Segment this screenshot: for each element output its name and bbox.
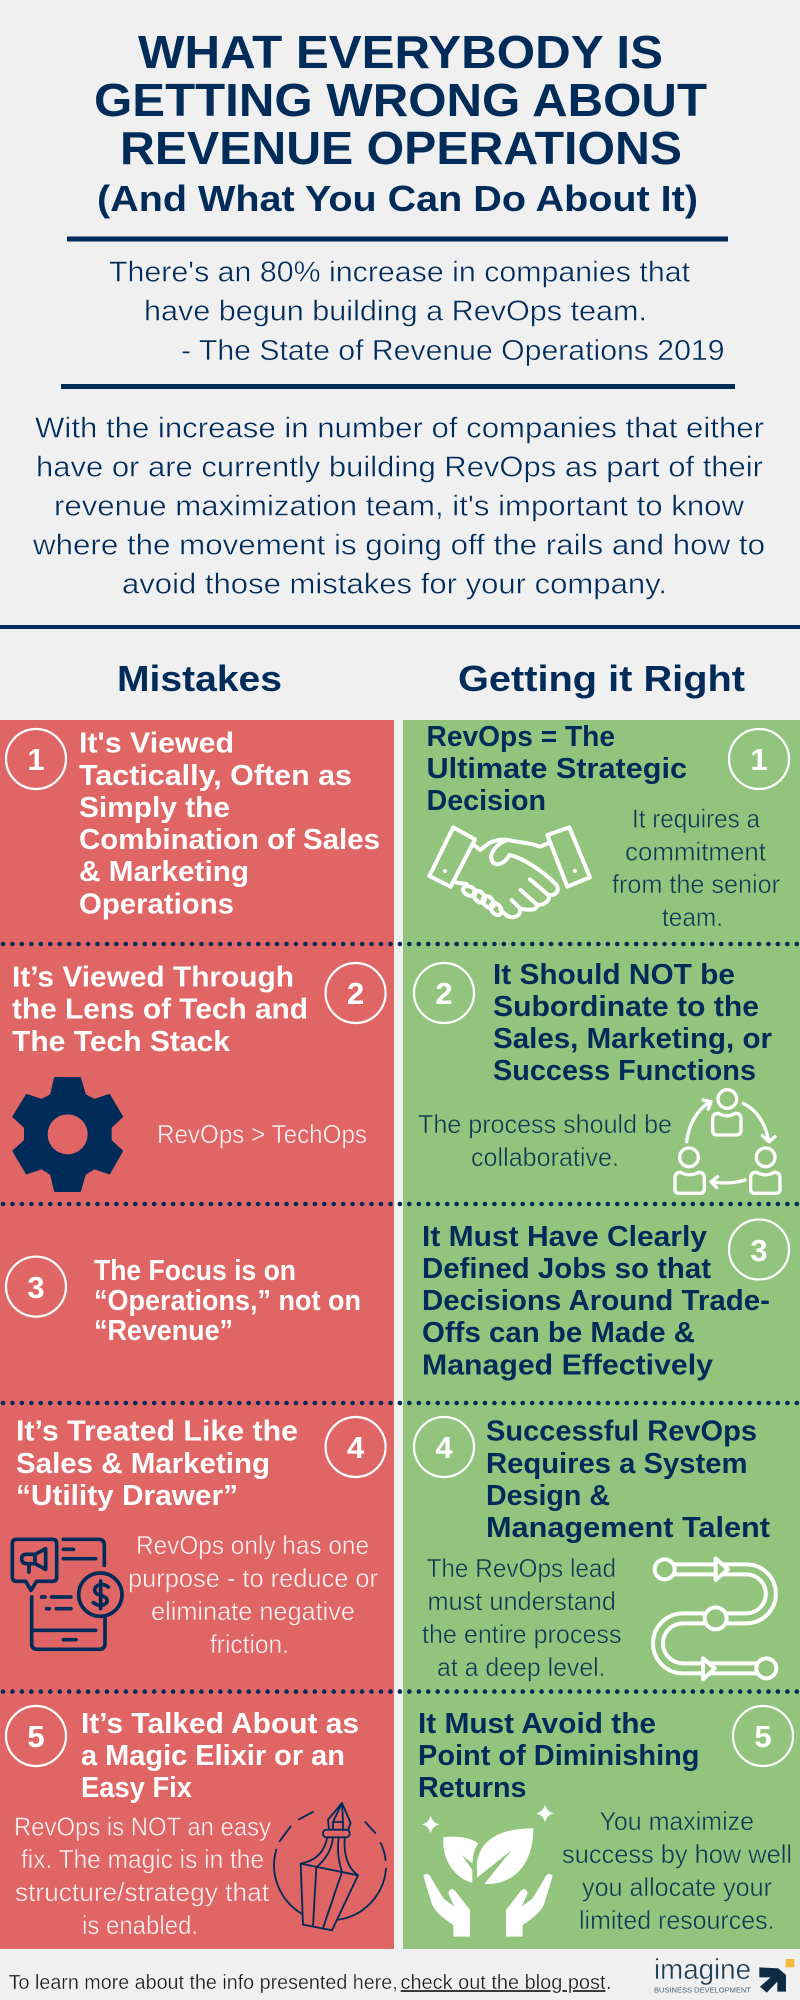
number badge 3	[6, 1257, 66, 1317]
body text: right 1: team.	[662, 902, 723, 932]
footer text	[9, 1972, 612, 1994]
panel: right 3	[403, 1204, 800, 1403]
heading: mistake 1: & Marketing	[79, 856, 249, 888]
heading: right 3: Decisions Around Trade-	[422, 1285, 770, 1317]
body text: mistake 5: is enabled.	[82, 1910, 198, 1940]
body text: right 1: It requires a	[632, 804, 760, 834]
icon: collaboration cycle	[675, 1090, 780, 1193]
heading: right 4: Management Talent	[486, 1512, 770, 1544]
body text: mistake 4	[128, 1530, 378, 1659]
number badge 1: 1	[27, 742, 45, 777]
panel: right 5	[403, 1692, 800, 1949]
title: WHAT EVERYBODY IS	[138, 26, 663, 78]
icon: elixir bottle	[274, 1803, 386, 1930]
body text: right 4: the entire process	[422, 1619, 622, 1649]
icon: handshake	[429, 827, 590, 917]
number badge 1: 1	[750, 742, 768, 777]
number badge 4: 4	[347, 1430, 365, 1465]
number badge 3	[729, 1220, 789, 1280]
heading: mistake 4: It’s Treated Like the	[16, 1416, 298, 1448]
heading: mistake 5: Easy Fix	[81, 1772, 192, 1804]
heading: right 1	[426, 721, 687, 817]
heading: right 4: Design &	[486, 1480, 610, 1512]
heading: right 2: Subordinate to the	[493, 991, 759, 1023]
intro paragraph: avoid those mistakes for your company.	[122, 569, 667, 601]
body text: right 1: from the senior	[612, 869, 780, 899]
body text: right 5: success by how well	[562, 1839, 792, 1869]
statistic quote: - The State of Revenue Operations 2019	[181, 335, 724, 367]
icon: phone with megaphone and dollar	[12, 1539, 122, 1649]
footer text: .	[606, 1972, 612, 1994]
number badge 4	[414, 1417, 474, 1477]
intro paragraph	[32, 412, 765, 601]
panel: mistake 1	[0, 720, 394, 944]
number badge 5	[733, 1706, 793, 1766]
heading: right 2: Sales, Marketing, or	[493, 1023, 772, 1055]
heading: mistake 3: “Operations,” not on	[94, 1285, 361, 1317]
body text: right 2: collaborative.	[471, 1142, 619, 1172]
body text: right 5: limited resources.	[579, 1905, 774, 1935]
number badge 1	[6, 729, 66, 789]
heading: right 1: Ultimate Strategic	[426, 753, 687, 785]
body text: right 4: at a deep level.	[437, 1652, 606, 1682]
logo: Imagine Business Development: BUSINESS DEVELOPMENT	[654, 1986, 751, 1995]
heading: mistake 4	[16, 1416, 298, 1512]
body text: right 2: The process should be	[418, 1109, 672, 1139]
heading: right 5: Returns	[418, 1772, 526, 1804]
body text: mistake 5	[14, 1812, 271, 1940]
heading: right 3	[422, 1221, 770, 1382]
heading: right 2	[493, 959, 772, 1087]
number badge 5: 5	[27, 1719, 45, 1754]
number badge 2	[414, 963, 474, 1023]
number badge 2	[326, 963, 386, 1023]
number badge 2: 2	[435, 976, 453, 1011]
intro paragraph: where the movement is going off the rails and how to	[32, 530, 765, 562]
body text: mistake 2: RevOps > TechOps	[157, 1119, 367, 1149]
heading: right 5	[418, 1708, 700, 1804]
number badge 1	[729, 729, 789, 789]
heading: right 2: Success Functions	[493, 1055, 756, 1087]
heading: mistake 1: Simply the	[79, 792, 230, 824]
logo: Imagine Business Development: imagine	[654, 1954, 751, 1986]
number badge 3: 3	[27, 1270, 45, 1305]
footer text: To learn more about the info presented here,	[9, 1972, 398, 1994]
heading: mistake 1: Tactically, Often as	[79, 760, 352, 792]
column heading: mistakes: Mistakes	[117, 658, 282, 699]
body text: mistake 4: eliminate negative	[151, 1596, 355, 1626]
icon: gear	[13, 1078, 122, 1191]
heading: right 4: Successful RevOps	[486, 1416, 757, 1448]
heading: right 3: It Must Have Clearly	[422, 1221, 707, 1253]
heading: mistake 4: “Utility Drawer”	[16, 1480, 238, 1512]
body text: right 1: commitment	[625, 837, 767, 867]
intro paragraph: have or are currently building RevOps as part of their	[36, 452, 763, 484]
number badge 3: 3	[750, 1233, 768, 1268]
body text: right 4	[422, 1553, 622, 1682]
body text: mistake 4: purpose - to reduce or	[128, 1563, 378, 1593]
panel: mistake 5	[0, 1692, 394, 1949]
body text: right 5: You maximize	[600, 1806, 754, 1836]
heading: mistake 2: The Tech Stack	[12, 1026, 231, 1058]
heading: mistake 5: It’s Talked About as	[81, 1708, 359, 1740]
body text: mistake 4: RevOps only has one	[136, 1530, 369, 1560]
statistic quote	[109, 256, 724, 367]
body text: right 2	[418, 1109, 672, 1172]
body text: right 4: must understand	[428, 1586, 616, 1616]
number badge 2: 2	[347, 976, 364, 1011]
number badge 5	[6, 1706, 66, 1766]
heading: mistake 2: the Lens of Tech and	[12, 994, 308, 1026]
title	[94, 26, 707, 174]
statistic quote: There's an 80% increase in companies that	[109, 256, 690, 288]
statistic quote: have begun building a RevOps team.	[144, 296, 647, 328]
heading: mistake 1: It's Viewed	[79, 728, 234, 760]
body text: right 1	[612, 804, 780, 932]
heading: right 4	[486, 1416, 770, 1544]
heading: mistake 4: Sales & Marketing	[16, 1448, 270, 1480]
panel: right 1	[403, 720, 800, 944]
intro paragraph: revenue maximization team, it's important to know	[54, 491, 745, 523]
title: REVENUE OPERATIONS	[120, 122, 682, 174]
heading: mistake 1	[79, 728, 380, 920]
body text: mistake 5: RevOps is NOT an easy	[14, 1812, 271, 1842]
panel: right 2	[403, 944, 800, 1204]
icon: winding process path	[655, 1558, 776, 1679]
body text: right 5	[562, 1806, 792, 1935]
heading: right 3: Offs can be Made &	[422, 1317, 695, 1349]
heading: right 5: It Must Avoid the	[418, 1708, 656, 1740]
heading: mistake 5	[81, 1708, 359, 1804]
heading: mistake 5: a Magic Elixir or an	[81, 1740, 345, 1772]
heading: right 3: Defined Jobs so that	[422, 1253, 711, 1285]
panel: right 4	[403, 1403, 800, 1692]
body text: mistake 5: structure/strategy that	[15, 1877, 270, 1907]
heading: mistake 3	[94, 1255, 361, 1347]
heading: mistake 3: The Focus is on	[94, 1255, 296, 1287]
heading: mistake 1: Operations	[79, 888, 234, 920]
logo: Imagine Business Development	[654, 1954, 794, 1995]
number badge 4	[326, 1417, 386, 1477]
heading: right 4: Requires a System	[486, 1448, 748, 1480]
footer text: check out the blog post	[400, 1972, 606, 1994]
intro paragraph: With the increase in number of companies that either	[35, 412, 764, 444]
panel: mistake 2	[0, 944, 394, 1204]
number badge 5: 5	[754, 1719, 772, 1754]
body text: right 4: The RevOps lead	[426, 1553, 616, 1583]
panel: mistake 4	[0, 1403, 394, 1692]
panel: mistake 3	[0, 1204, 394, 1403]
heading: right 3: Managed Effectively	[422, 1350, 713, 1382]
heading: right 1: RevOps = The	[426, 721, 615, 753]
heading: mistake 2	[12, 962, 308, 1058]
title: GETTING WRONG ABOUT	[94, 74, 707, 126]
icon: hands holding plant	[422, 1804, 554, 1937]
number badge 4: 4	[435, 1430, 453, 1465]
body text: right 5: you allocate your	[582, 1872, 772, 1902]
column heading: getting it right: Getting it Right	[458, 658, 745, 699]
body text: mistake 5: fix. The magic is in the	[21, 1844, 264, 1874]
heading: right 5: Point of Diminishing	[418, 1740, 700, 1772]
subtitle: (And What You Can Do About It)	[97, 178, 698, 219]
heading: mistake 2: It’s Viewed Through	[12, 962, 294, 994]
heading: mistake 1: Combination of Sales	[79, 824, 380, 856]
heading: right 1: Decision	[426, 785, 546, 817]
heading: right 2: It Should NOT be	[493, 959, 735, 991]
body text: mistake 4: friction.	[210, 1629, 289, 1659]
heading: mistake 3: “Revenue”	[94, 1315, 233, 1347]
